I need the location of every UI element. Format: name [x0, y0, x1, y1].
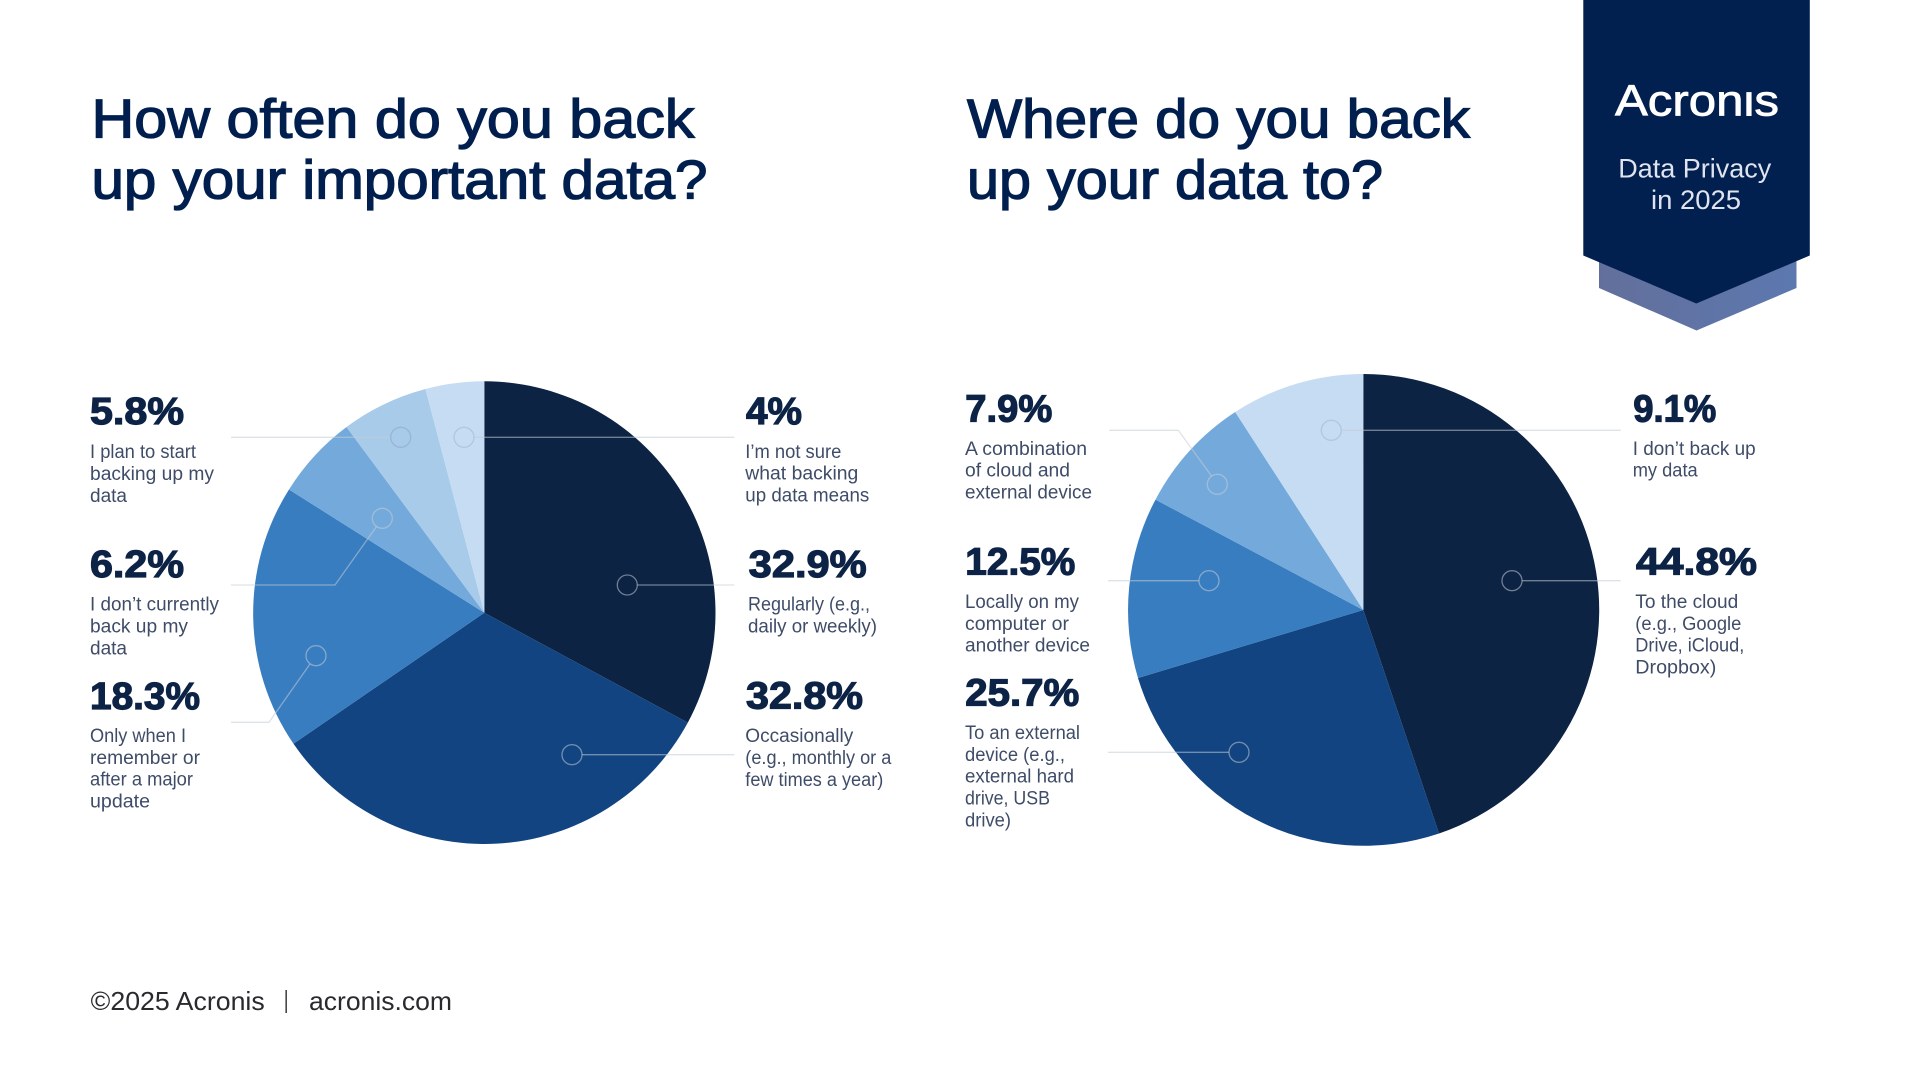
heading: how often: How often do you back	[92, 88, 695, 150]
callout: 9.1%: 9.1%	[1633, 389, 1716, 431]
callout: 32.9%: 32.9%	[749, 544, 867, 586]
leader line: 12.5%	[1108, 571, 1219, 591]
ribbon shadow	[1599, 240, 1796, 330]
callout: 7.9%	[965, 389, 1092, 503]
ribbon body	[1583, 0, 1810, 304]
callout: 32.9%: daily or weekly)	[748, 616, 877, 637]
banner subtitle: Data Privacy	[1618, 154, 1772, 184]
panel: how often do you back up	[90, 88, 892, 844]
slice: occasionally 32.8%	[294, 613, 688, 844]
leader line: 5.8%	[231, 427, 411, 447]
callout: 18.3%	[90, 676, 201, 813]
slice: locally 12.5%	[1128, 500, 1363, 678]
heading: where: up your data to?	[967, 148, 1383, 210]
callout: 32.8%: few times a year)	[745, 770, 883, 791]
banner subtitle	[1618, 154, 1772, 215]
callout: 25.7%: device (e.g.,	[965, 745, 1065, 766]
callout: 32.8%	[745, 676, 892, 791]
callout: 9.1%: my data	[1633, 461, 1698, 482]
callout: 12.5%: 12.5%	[965, 541, 1075, 583]
footer: copyright: acronis.com	[309, 986, 452, 1016]
callout: 4%: up data means	[745, 486, 869, 506]
callout: 6.2%: data	[90, 638, 127, 659]
callout: 6.2%: I don’t currently	[90, 595, 219, 616]
callout: 5.8%: I plan to start	[90, 442, 197, 463]
leader line: 32.8%	[562, 745, 734, 765]
callout: 25.7%	[965, 673, 1080, 832]
pie chart: backup frequency	[253, 381, 715, 844]
footer: copyright: ©2025 Acronis	[91, 986, 265, 1016]
callout: 25.7%: To an external	[965, 723, 1080, 744]
leader line: 6.2%	[231, 508, 392, 585]
callout: 9.1%	[1633, 389, 1756, 482]
slice: not sure 4%	[426, 381, 484, 613]
callout: 5.8%: 5.8%	[90, 391, 184, 433]
callout: 6.2%	[90, 544, 219, 659]
slice: combination 7.9%	[1156, 412, 1363, 610]
banner: Acronis ribbon	[1583, 0, 1810, 330]
callout: 4%	[744, 391, 869, 506]
callout: 18.3%: Only when I	[90, 726, 186, 747]
leader line: 44.8%	[1502, 571, 1621, 591]
callout: 6.2%: 6.2%	[90, 544, 184, 586]
pie chart: backup location	[1128, 374, 1599, 846]
callout: 5.8%: data	[90, 486, 127, 507]
callout: 5.8%: backing up my	[90, 464, 214, 485]
callout: 7.9%: 7.9%	[965, 389, 1052, 431]
slice: regularly 32.9%	[484, 381, 715, 723]
slice: don't back up 9.1%	[1235, 374, 1363, 610]
callout: 25.7%: drive)	[965, 811, 1011, 832]
callout: 5.8%	[90, 391, 214, 507]
callout: 12.5%: Locally on my	[965, 592, 1079, 613]
callout: 4%: 4%	[746, 391, 802, 433]
callout: 32.9%: Regularly (e.g.,	[748, 595, 870, 616]
callout: 12.5%: another device	[965, 636, 1090, 657]
callout: 44.8%: (e.g., Google	[1635, 614, 1741, 635]
callout: 44.8%: Drive, iCloud,	[1635, 636, 1744, 657]
leader line: 4%	[454, 427, 734, 447]
leader line: 9.1%	[1321, 420, 1621, 440]
heading: where: Where do you back	[967, 88, 1471, 150]
callout: 32.8%: Occasionally	[745, 726, 854, 747]
callout: 44.8%: 44.8%	[1636, 541, 1757, 583]
callout: 25.7%: 25.7%	[965, 673, 1079, 715]
callout: 7.9%: external device	[965, 482, 1092, 503]
callout: 18.3%: remember or	[90, 748, 201, 769]
callout: 18.3%: after a major	[90, 770, 194, 791]
logo: Acronis: Acronis	[1615, 77, 1779, 126]
callout: 9.1%: I don’t back up	[1633, 439, 1756, 460]
leader line: 7.9%	[1109, 430, 1227, 494]
callout: 44.8%	[1635, 541, 1757, 679]
callout: 6.2%: back up my	[90, 616, 189, 637]
callout: 25.7%: drive, USB	[965, 789, 1050, 810]
callout: 7.9%: of cloud and	[965, 461, 1070, 482]
callout: 44.8%: To the cloud	[1635, 592, 1738, 613]
banner subtitle: in 2025	[1651, 185, 1741, 215]
leader line: 25.7%	[1108, 742, 1249, 762]
leader line: 18.3%	[231, 646, 326, 722]
callout: 7.9%: A combination	[965, 439, 1087, 460]
leader line: 32.9%	[617, 575, 734, 595]
callout: 4%: I’m not sure	[745, 442, 841, 463]
callout: 25.7%: external hard	[965, 767, 1074, 788]
callout: 44.8%: Dropbox)	[1635, 658, 1716, 679]
callout: 12.5%	[965, 541, 1090, 657]
slice: plan to start 5.8%	[346, 389, 484, 613]
callout: 4%: what backing	[744, 464, 858, 484]
heading: where	[967, 88, 1471, 210]
callout: 12.5%: computer or	[965, 614, 1070, 635]
heading: how often: up your important data?	[92, 148, 708, 210]
slice: external device 25.7%	[1138, 610, 1439, 846]
callout: 18.3%: 18.3%	[90, 676, 200, 718]
panel: where do you back up	[965, 88, 1757, 846]
slice: only when I remember 18.3%	[253, 490, 484, 744]
footer: copyright	[91, 986, 452, 1016]
slice: to the cloud 44.8%	[1363, 374, 1599, 834]
callout: 18.3%: update	[90, 792, 150, 813]
callout: 32.8%: 32.8%	[746, 676, 863, 718]
callout: 32.9%	[748, 544, 877, 637]
callout: 32.8%: (e.g., monthly or a	[745, 748, 892, 769]
slice: don't currently back up 6.2%	[289, 427, 484, 613]
heading: how often	[92, 88, 708, 210]
